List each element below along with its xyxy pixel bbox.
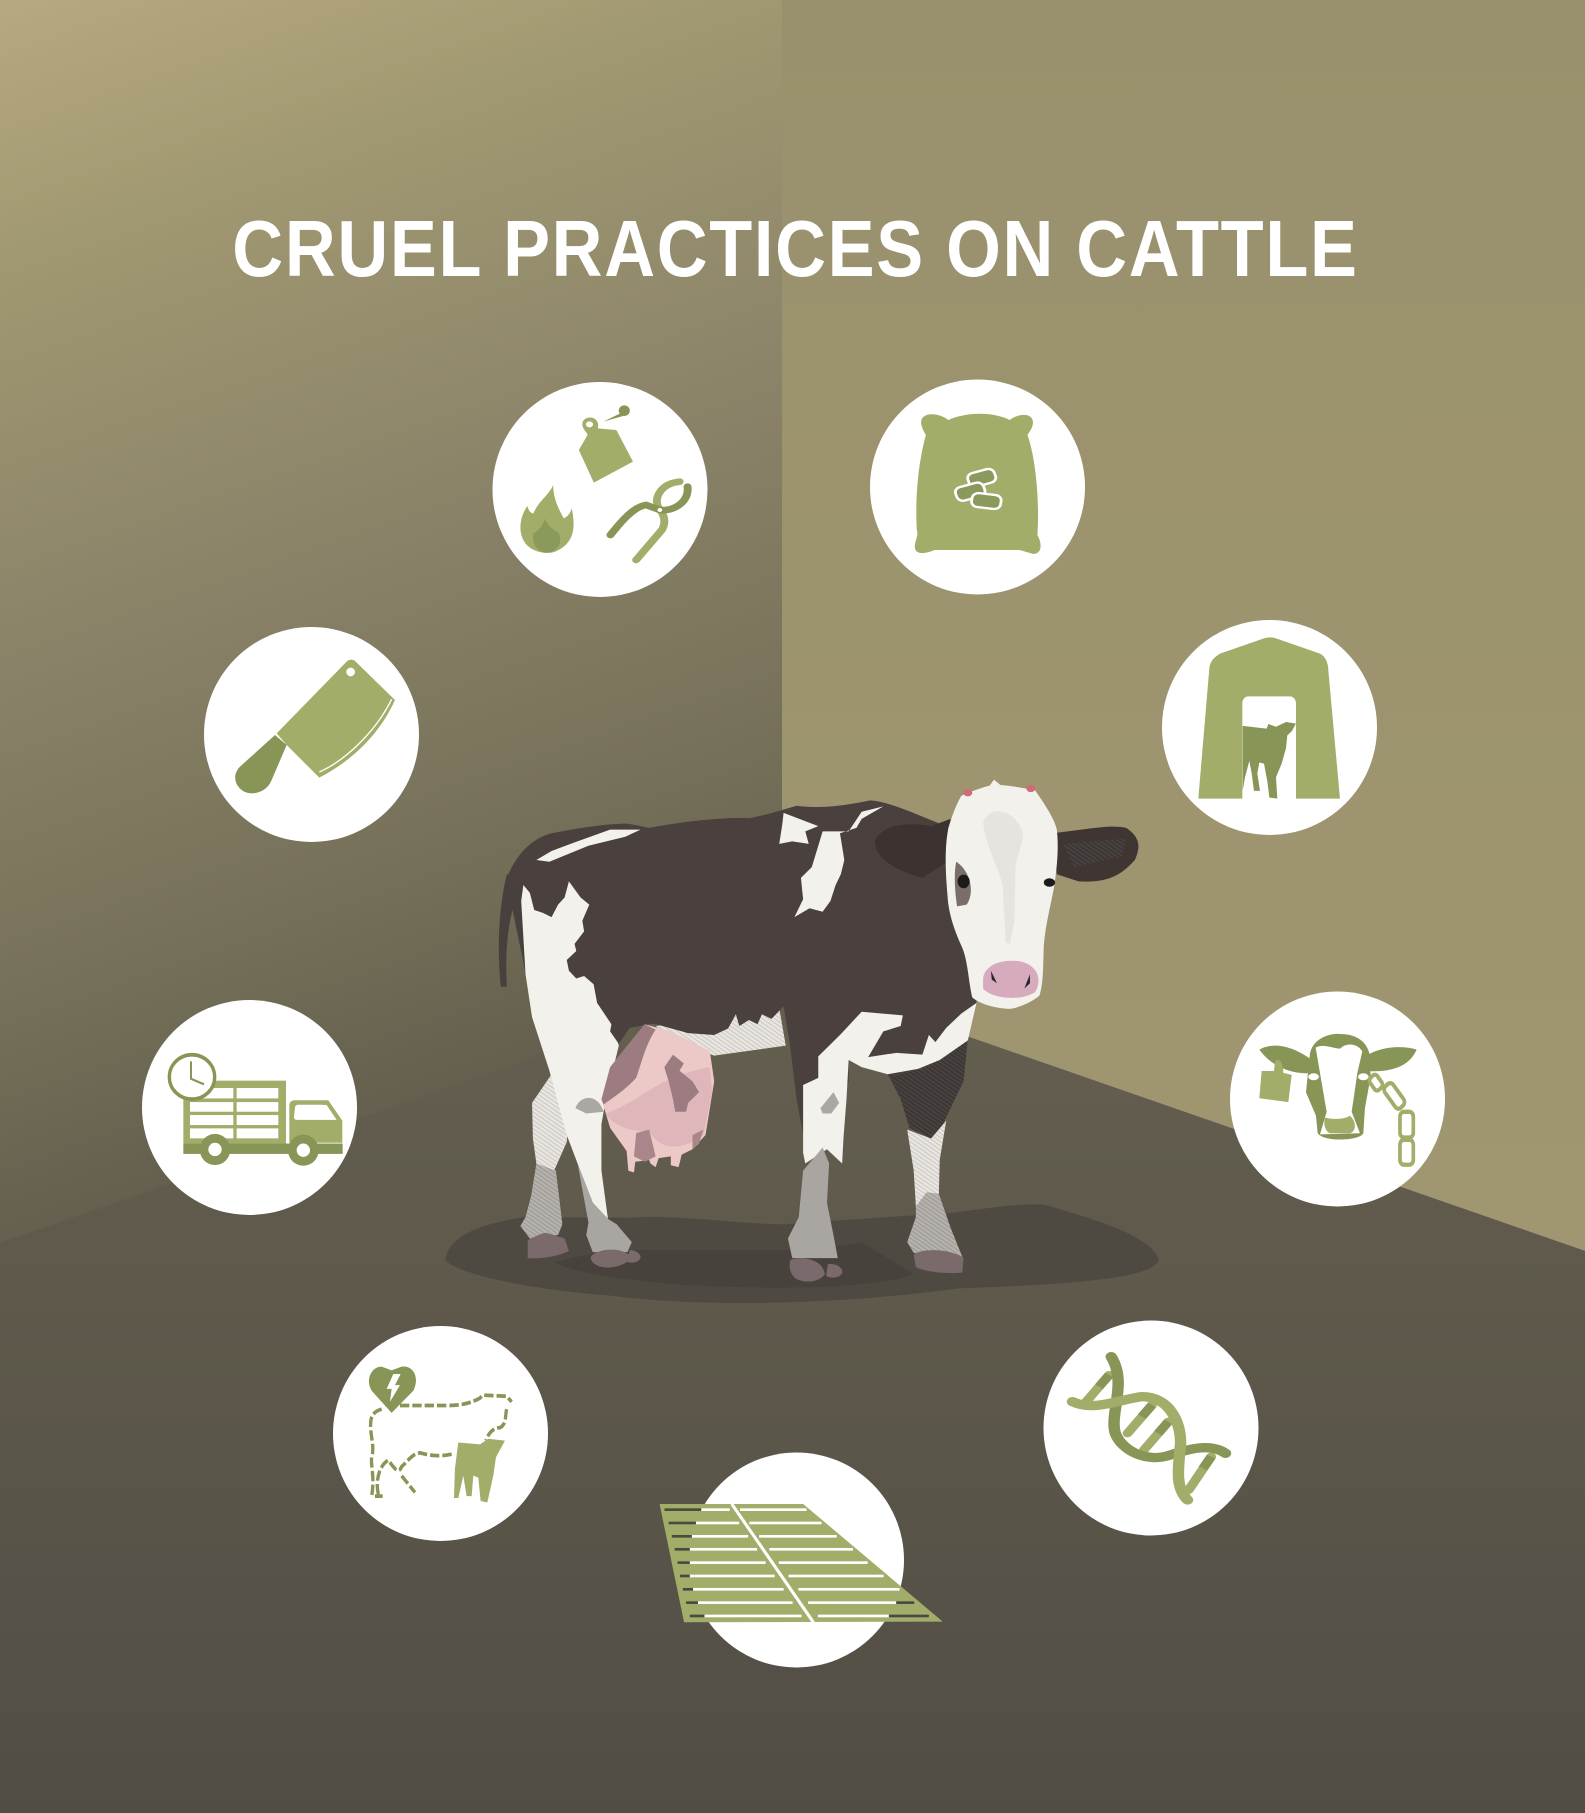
icon: broken heart, dashed cow and calf (369, 1366, 512, 1502)
icon: sack with pellets (915, 414, 1041, 554)
belly hatch (656, 1008, 786, 1056)
cow shadow (445, 1204, 1159, 1303)
circle: tag, branding and pliers (492, 382, 708, 597)
icon: DNA helix (1072, 1357, 1225, 1500)
left ear (875, 819, 951, 878)
near hind leg (521, 878, 641, 1268)
icon: truck and clock (169, 1055, 343, 1166)
circle: cow with chain and ear tag (1230, 992, 1445, 1206)
icon: cow head, tag and chain (1259, 1034, 1417, 1165)
circle: cleaver (204, 627, 419, 842)
near front leg and chest (788, 1003, 977, 1282)
right ear (1052, 827, 1138, 882)
icon: tag, fire and nose pliers (520, 405, 688, 560)
far hind leg (520, 1074, 569, 1258)
cow head (946, 780, 1058, 1009)
circle: feed sack (870, 380, 1085, 594)
icon: hutch with calf (1198, 637, 1340, 799)
circle: cow and calf separation (333, 1326, 548, 1541)
icon: cleaver (235, 660, 395, 793)
circle: transport truck (142, 1000, 357, 1215)
circle: slatted floor (660, 1452, 943, 1668)
circle: calf hutch (1162, 620, 1377, 835)
udder (601, 1024, 714, 1172)
cow body (506, 800, 977, 1156)
circle: gene editing (1044, 1320, 1258, 1536)
white markings (536, 806, 883, 917)
cow tail (499, 874, 528, 987)
icon: slatted floor (660, 1504, 943, 1622)
cow illustration (445, 780, 1159, 1303)
title: CRUEL PRACTICES ON CATTLE (232, 204, 1357, 293)
far front leg (888, 1039, 968, 1273)
